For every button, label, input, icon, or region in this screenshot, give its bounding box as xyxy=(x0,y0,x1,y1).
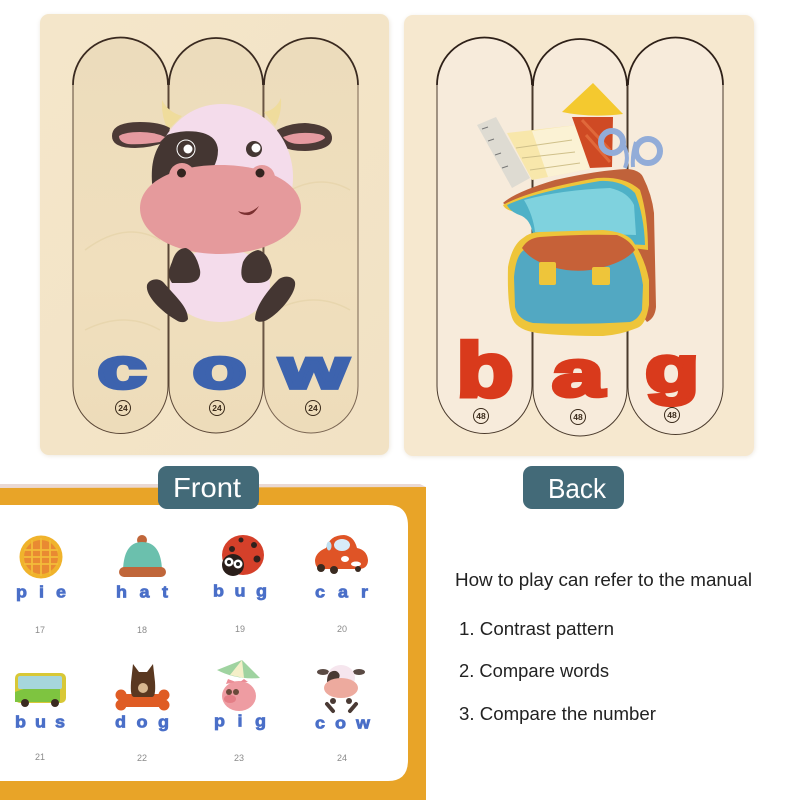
button: Front xyxy=(158,466,259,509)
text block: how to play: 3. Compare the number xyxy=(459,704,656,724)
button: Front: Front xyxy=(173,472,241,503)
number badges: 48: 48 xyxy=(667,410,677,420)
word: pig: pig xyxy=(214,711,266,730)
number: 21: 21 xyxy=(35,752,45,762)
word: bag: b xyxy=(456,328,514,413)
number: 19: 19 xyxy=(235,624,245,634)
icon: dog with bone xyxy=(116,664,170,710)
word: bag: a xyxy=(552,338,605,411)
number: 20: 20 xyxy=(337,624,347,634)
illustration: school bag xyxy=(477,83,660,336)
word: cow xyxy=(97,337,349,400)
icon: ladybug xyxy=(222,535,264,576)
button: Back xyxy=(523,466,624,509)
number: 22: 22 xyxy=(137,753,147,763)
puzzle strips: back xyxy=(437,38,723,436)
number badges: 24 xyxy=(116,400,320,416)
icon: pig with umbrella xyxy=(217,660,260,711)
icon: small cow xyxy=(317,665,365,711)
word: cow: c xyxy=(97,337,147,400)
number badges: 48: 48 xyxy=(573,412,583,422)
number: 17: 17 xyxy=(35,625,45,635)
icon: hat xyxy=(119,535,166,577)
number: 18: 18 xyxy=(137,625,147,635)
icon: bus xyxy=(15,673,66,707)
word: cow: cow xyxy=(315,713,371,732)
word: hat: hat xyxy=(116,582,168,601)
text block: how to play: How to play can refer to the manual xyxy=(455,570,752,590)
word: bus: bus xyxy=(15,712,65,731)
panel: front puzzle board xyxy=(40,14,390,456)
button: Back: Back xyxy=(548,473,607,504)
word: car: car xyxy=(315,582,368,601)
number: 23: 23 xyxy=(234,753,244,763)
number badges: 24: 24 xyxy=(212,403,222,413)
word: cow: o xyxy=(193,337,246,400)
puzzle strips: front xyxy=(73,38,358,434)
text block: how to play: 2. Compare words xyxy=(459,661,609,681)
word: pie: pie xyxy=(16,582,66,601)
panel: back puzzle board xyxy=(404,15,755,457)
text block: how to play: 1. Contrast pattern xyxy=(459,619,614,639)
number: 24: 24 xyxy=(337,753,347,763)
icon: pie xyxy=(20,536,62,578)
number badges: 24: 24 xyxy=(118,403,128,413)
icon: car xyxy=(315,535,368,574)
number badges: 48: 48 xyxy=(476,411,486,421)
number badges: 48 xyxy=(474,408,680,424)
number badges: 24: 24 xyxy=(308,403,318,413)
word: bug: bug xyxy=(213,581,267,600)
illustration: cow xyxy=(112,98,332,322)
word: cow: w xyxy=(279,338,349,400)
word: bag: g xyxy=(645,333,699,405)
word: bag xyxy=(456,328,699,413)
panel: picture book xyxy=(0,484,426,800)
word: dog: dog xyxy=(115,712,169,731)
text block: how to play xyxy=(455,570,752,724)
